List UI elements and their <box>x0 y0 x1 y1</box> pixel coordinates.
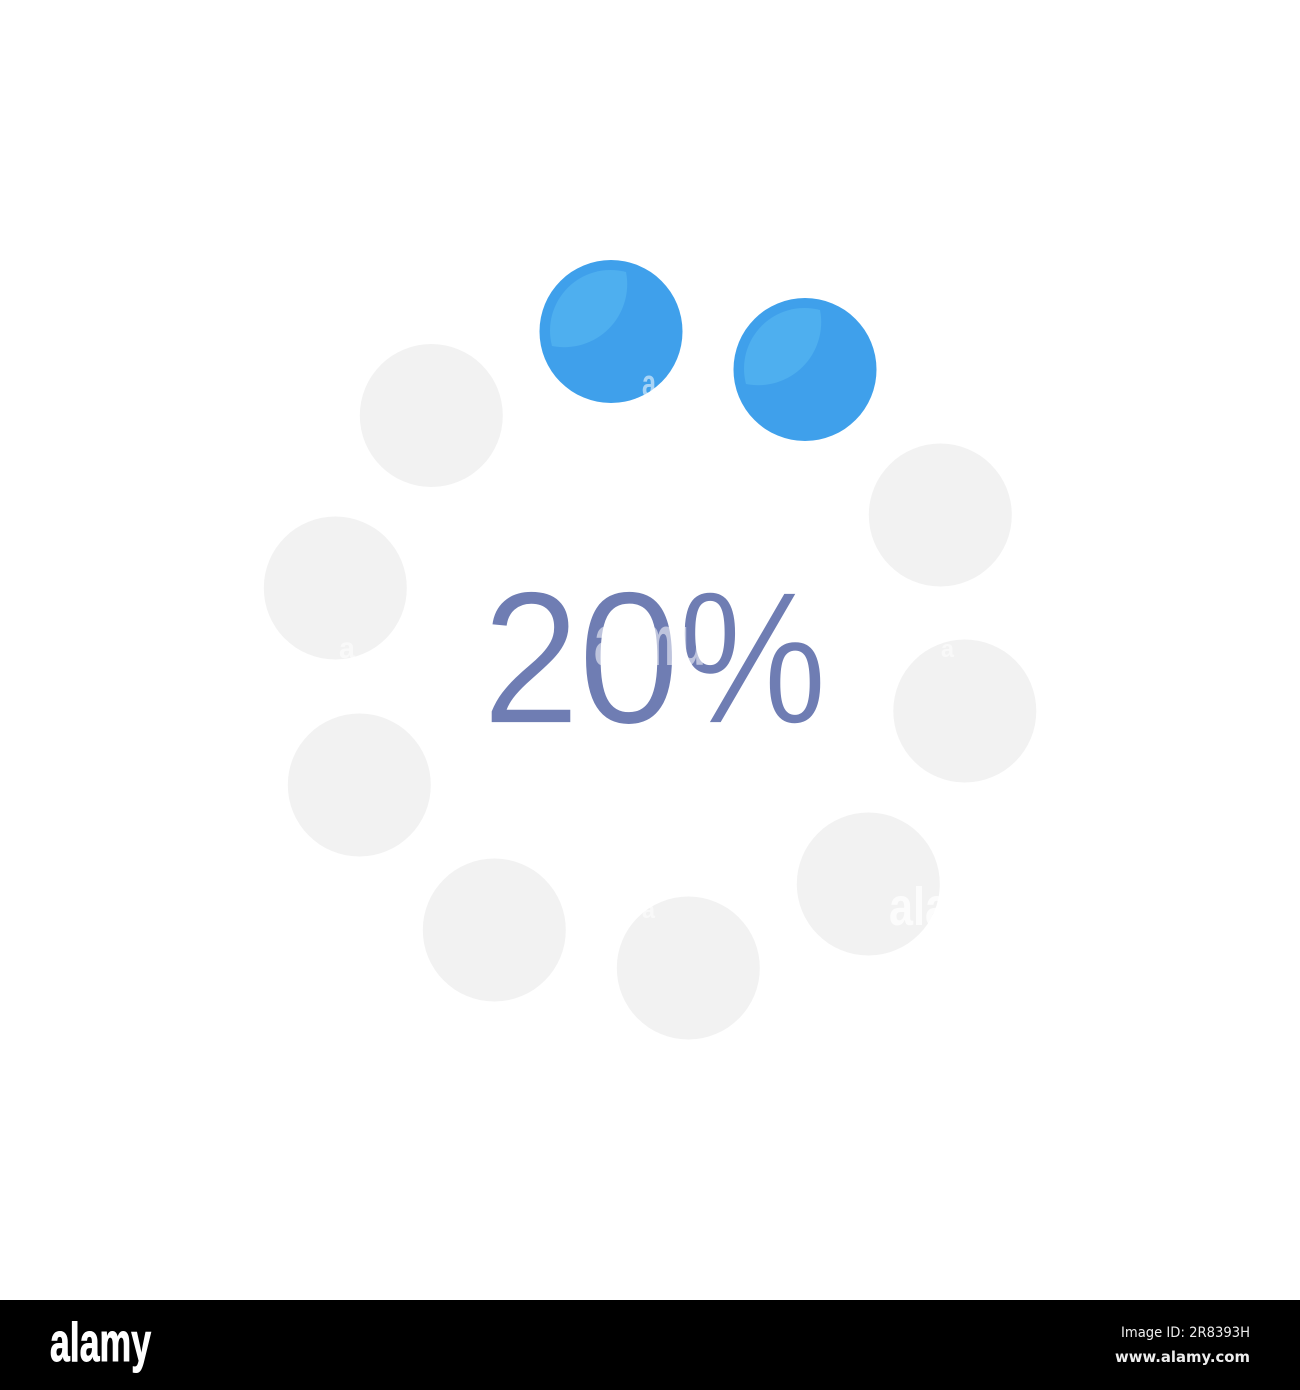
empty dot 9 <box>264 516 407 660</box>
faint watermark fragments: a mu <box>594 602 706 681</box>
filled dot 2 <box>734 298 876 441</box>
faint watermark fragments: a <box>642 897 656 924</box>
filled dot 1 <box>540 260 682 403</box>
empty dot 7 <box>423 858 566 1002</box>
percentage label: % <box>678 553 827 764</box>
footer bar <box>0 1300 1300 1390</box>
empty dot 3 <box>869 444 1012 586</box>
empty dot 4 <box>893 640 1036 782</box>
faint watermark fragments <box>339 363 955 937</box>
faint watermark fragments: a <box>339 632 355 665</box>
percentage label <box>482 553 827 764</box>
empty dot 8 <box>288 714 431 856</box>
loading ring <box>264 260 1036 1040</box>
faint watermark fragments: a <box>941 636 955 663</box>
empty dot 6 <box>617 896 760 1040</box>
percentage label: 2 <box>482 553 580 764</box>
empty dot 5 <box>797 812 940 956</box>
image id: Image ID: 2R8393H <box>1121 1325 1250 1341</box>
website: www.alamy.com <box>1115 1348 1250 1366</box>
faint watermark fragments: a <box>642 363 657 405</box>
empty dot 10 <box>360 344 503 487</box>
faint watermark fragments: ala <box>889 877 950 937</box>
percentage label: 0 <box>578 553 680 764</box>
alamy logo: alamy <box>50 1311 151 1373</box>
